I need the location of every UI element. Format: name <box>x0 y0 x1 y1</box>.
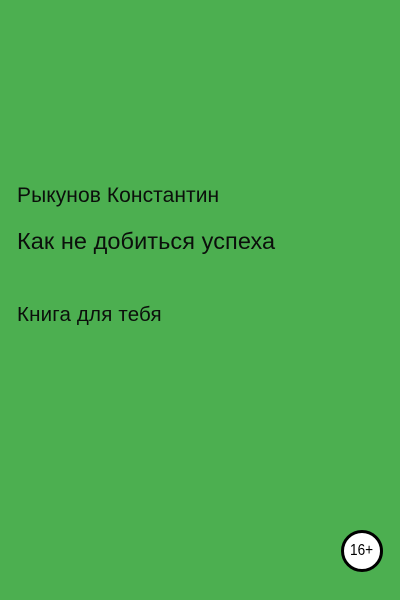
age rating badge: 16+ <box>341 530 383 572</box>
author name: Рыкунов Константин <box>17 184 219 207</box>
book title: Как не добиться успеха <box>17 228 275 254</box>
subtitle: Книга для тебя <box>17 303 162 326</box>
age rating badge: 16+: 16+ <box>350 542 374 559</box>
